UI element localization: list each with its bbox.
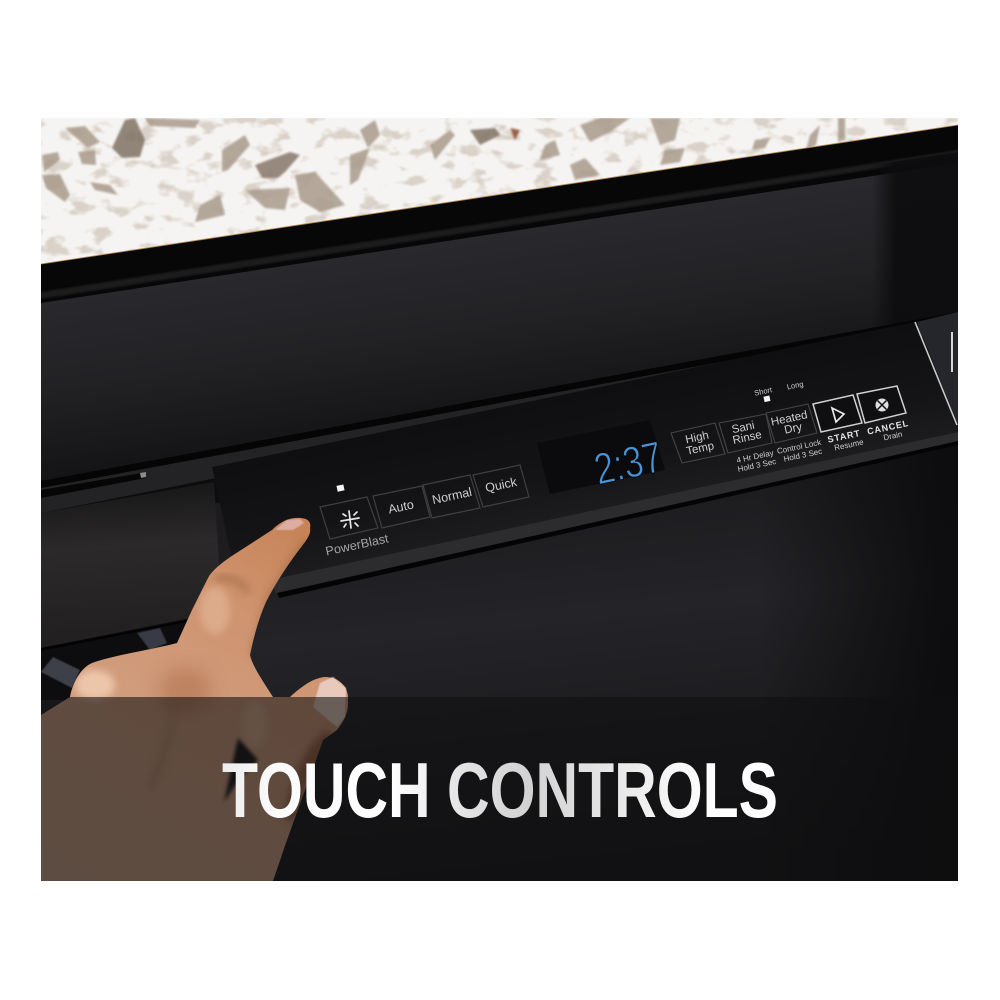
button: Sani Rinse: Rinse xyxy=(732,429,763,447)
label: 4 Hr Delay: 4 Hr Delay xyxy=(736,448,774,465)
button: Normal xyxy=(423,475,480,518)
button: Quick: Quick xyxy=(484,475,519,495)
label: Control Lock xyxy=(777,440,822,462)
label: START Resume: Resume xyxy=(833,437,865,452)
button: Heated Dry xyxy=(766,404,817,443)
label: CANCEL Drain: CANCEL xyxy=(866,418,910,437)
strip above the control panel xyxy=(41,315,958,513)
label: 4 Hr Delay xyxy=(736,451,776,472)
label: START Resume: START xyxy=(827,428,861,445)
button: CANCEL xyxy=(857,386,906,423)
hand xyxy=(41,515,351,881)
icon: PowerBlast star xyxy=(341,511,359,528)
label: PowerBlast: PowerBlast xyxy=(324,531,390,559)
countertop edge xyxy=(41,125,958,264)
button: High Temp xyxy=(671,423,725,463)
button: Sani Rinse xyxy=(719,414,772,453)
indicator light right xyxy=(763,395,770,402)
button: PowerBlast xyxy=(320,497,378,539)
black trim under countertop xyxy=(41,126,958,500)
digital display xyxy=(540,432,665,494)
button: Heated Dry: Dry xyxy=(783,421,803,437)
indicator light left xyxy=(336,484,345,492)
button: High Temp: High xyxy=(684,430,710,446)
control fascia xyxy=(212,322,958,580)
caption band xyxy=(41,697,958,881)
thumbnail xyxy=(313,677,346,727)
trim highlight xyxy=(41,150,958,299)
title: TOUCH CONTROLS xyxy=(222,746,778,834)
icon: play xyxy=(832,408,844,422)
digital display: 2:37 xyxy=(590,432,667,495)
button: Auto: Auto xyxy=(387,497,415,517)
label: Control Lock: Control Lock xyxy=(776,438,823,456)
upper door panel xyxy=(41,173,893,481)
button: Auto xyxy=(373,486,430,528)
button: Normal: Normal xyxy=(431,485,473,507)
chrome trim right xyxy=(915,312,958,425)
icon: cancel xyxy=(876,398,888,412)
lower door panel xyxy=(41,465,906,736)
fingernail xyxy=(275,519,304,530)
button: High Temp: Temp xyxy=(685,440,715,458)
label: CANCEL Drain xyxy=(868,420,908,440)
granite countertop xyxy=(41,118,958,268)
button: Heated Dry: Heated xyxy=(770,409,809,429)
label: START Resume xyxy=(828,430,864,450)
button: START xyxy=(813,395,862,432)
label: CANCEL Drain: Drain xyxy=(883,430,903,442)
photo: dishwasher control panel xyxy=(41,118,958,881)
lower left gloss area xyxy=(41,618,188,700)
label: 4 Hr Delay: Hold 3 Sec xyxy=(737,457,777,474)
button: Quick xyxy=(473,465,529,507)
handle recess xyxy=(41,472,146,498)
label: Control Lock: Hold 3 Sec xyxy=(783,447,823,464)
photo base xyxy=(41,125,958,513)
label: Long: Long xyxy=(786,379,804,392)
hand shading xyxy=(75,540,332,820)
label: Short: Short xyxy=(753,385,774,398)
button: Sani Rinse: Sani xyxy=(731,420,756,436)
left panel xyxy=(41,482,219,592)
gap between thumb and finger xyxy=(224,738,258,802)
